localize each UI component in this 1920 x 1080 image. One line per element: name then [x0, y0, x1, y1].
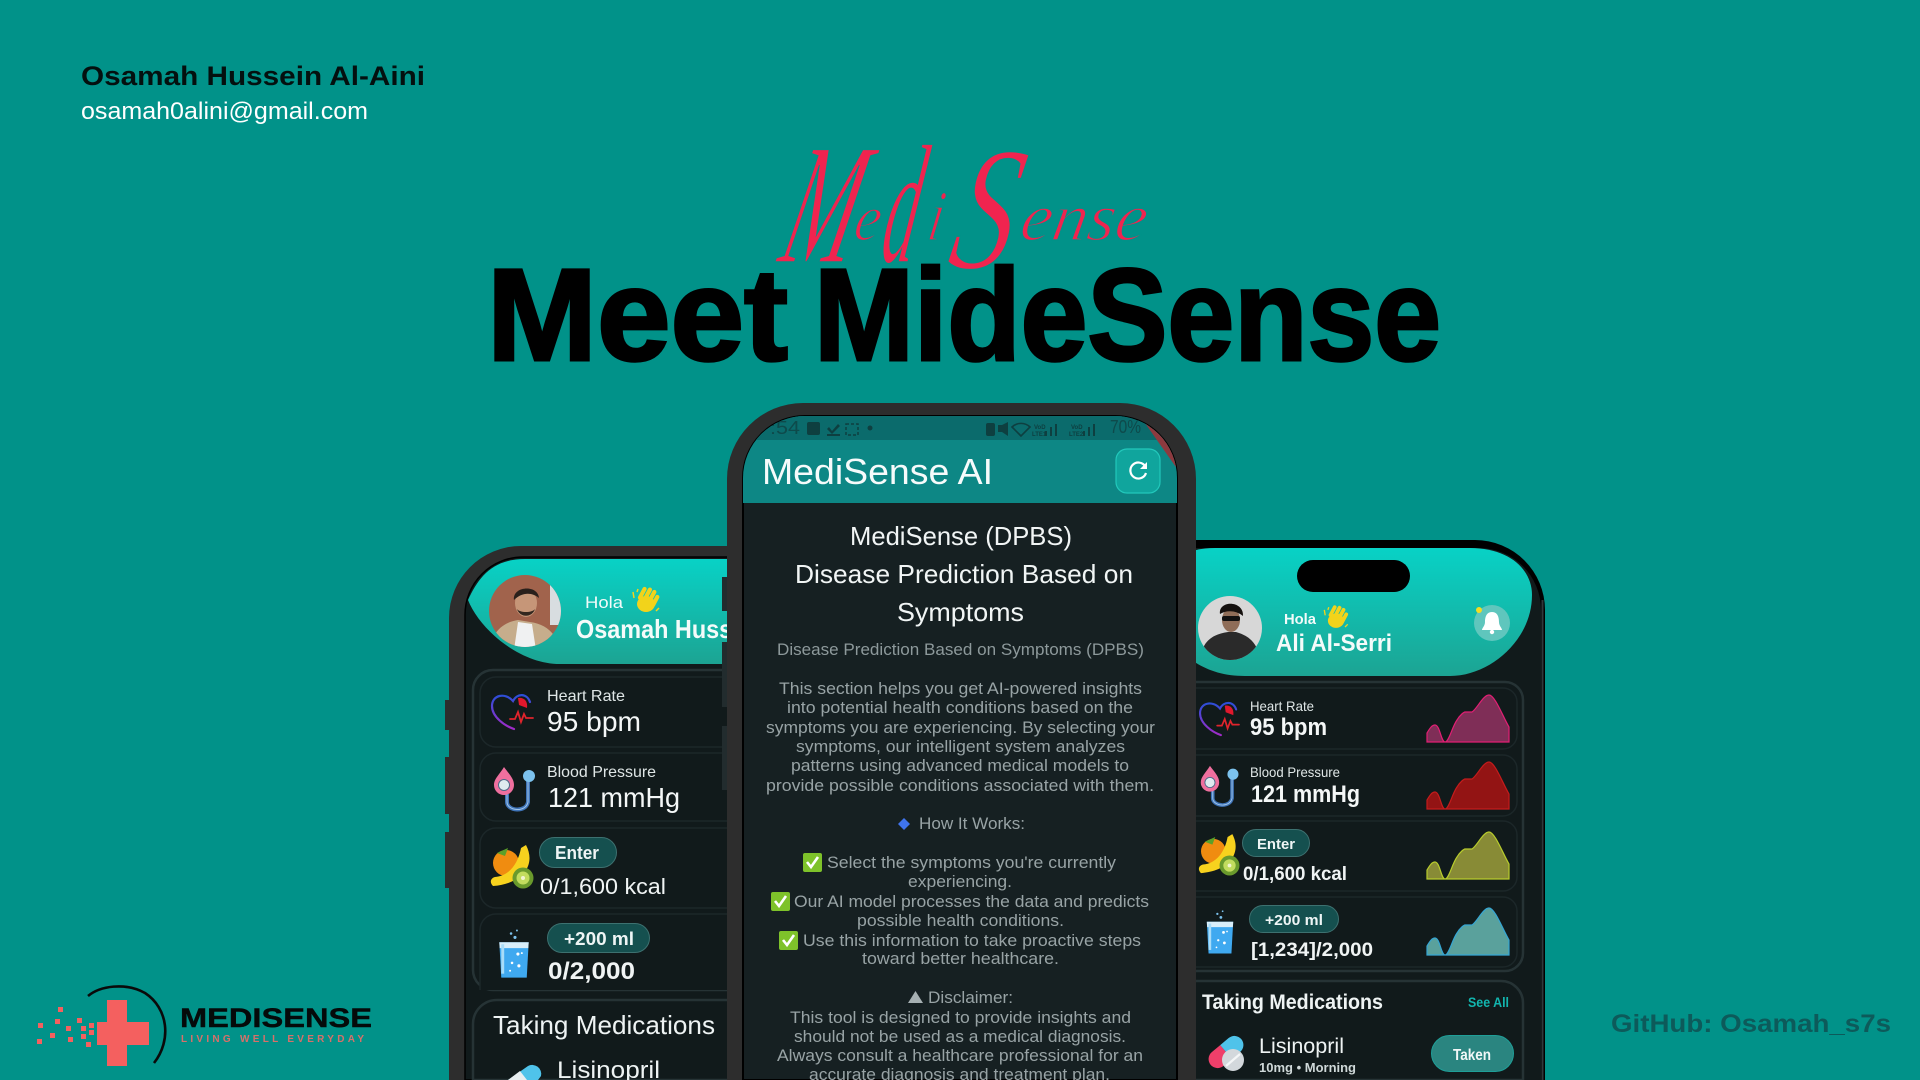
script wordmark: [765, 108, 1155, 307]
script wordmark: e: [849, 182, 888, 255]
left blood pressure: 121 mmHg: [548, 782, 680, 813]
left scroll indicators: [722, 577, 727, 790]
right water: [1207, 906, 1509, 961]
github label: GitHub: Osamah_s7s: [1611, 1010, 1891, 1038]
right medications panel: [1170, 981, 1523, 1080]
left pill icon: [508, 1065, 541, 1080]
disclaimer: Always consult a healthcare professional for an: [777, 1046, 1143, 1065]
right blood pressure: 121 mmHg: [1251, 781, 1360, 808]
left phone: [445, 546, 727, 1080]
how it works steps: experiencing.: [908, 872, 1012, 891]
how it works heading: How It Works:: [919, 814, 1025, 833]
description paragraph: This section helps you get AI-powered insights: [779, 679, 1142, 698]
description paragraph: symptoms, our intelligent system analyzes: [796, 737, 1125, 756]
chart: heart rate: [1427, 695, 1509, 742]
script wordmark: d: [871, 111, 939, 300]
right calories: Enter: [1257, 836, 1295, 853]
right medications panel: Lisinopril: [1259, 1035, 1344, 1058]
logo: [37, 986, 372, 1066]
how it works steps: possible health conditions.: [857, 911, 1064, 930]
main title: MideSense: [814, 241, 1441, 388]
screen heading: MediSense (DPBS): [850, 521, 1072, 551]
status bar: [743, 416, 1177, 440]
right heart rate: 95 bpm: [1250, 714, 1327, 741]
how it works steps: toward better healthcare.: [862, 949, 1059, 968]
right heart rate: Heart Rate: [1250, 698, 1314, 714]
app header: [743, 416, 1177, 503]
left heart rate: [492, 688, 641, 737]
center phone: [727, 403, 1196, 1080]
left vitals panel: [472, 668, 727, 992]
refresh button: [1116, 449, 1160, 493]
right blood pressure: Blood Pressure: [1250, 764, 1340, 780]
left avatar: [489, 575, 562, 650]
description paragraph: patterns using advanced medical models to: [791, 756, 1129, 775]
author name: Osamah Hussein Al-Aini: [81, 61, 425, 91]
taken button: Taken: [1453, 1047, 1491, 1064]
script wordmark: ense: [1015, 179, 1155, 255]
left calories: 0/1,600 kcal: [540, 874, 666, 899]
main title: [487, 241, 1441, 388]
how it works steps: Select the symptoms you're currently: [827, 853, 1117, 872]
right phone header: Hola: [1284, 611, 1317, 628]
notification bell: [1474, 605, 1510, 641]
left phone header: Hola: [585, 593, 624, 612]
right calories: [1199, 830, 1509, 885]
left medications panel: [472, 998, 727, 1080]
taken button: [1432, 1036, 1514, 1072]
right heart rate: [1200, 695, 1509, 742]
left phone header: [468, 559, 727, 664]
description paragraph: symptoms you are experiencing. By selecting your: [766, 718, 1155, 737]
disclaimer: This tool is designed to provide insights and: [790, 1008, 1131, 1027]
disclaimer: Disclaimer:: [928, 988, 1013, 1007]
left heart rate: Heart Rate: [547, 688, 625, 705]
disclaimer: [777, 988, 1143, 1080]
how it works heading: [898, 817, 1024, 830]
status bar: 70%: [1110, 417, 1141, 437]
description paragraph: [766, 679, 1155, 795]
how it works steps: Our AI model processes the data and predicts: [794, 892, 1149, 911]
left heart rate: 95 bpm: [547, 706, 641, 737]
left calories: Enter: [555, 843, 599, 863]
status bar: LTE2: [1069, 432, 1084, 438]
left blood pressure: [494, 764, 680, 813]
right phone: [1196, 540, 1545, 1080]
right water: +200 ml: [1265, 912, 1323, 929]
dynamic island: [1297, 560, 1410, 592]
status bar: LTE1: [1032, 432, 1047, 438]
right medications panel: 10mg • Morning: [1259, 1060, 1356, 1075]
left medications panel: Taking Medications: [493, 1010, 715, 1040]
right medications panel: Taking Medications: [1202, 991, 1383, 1014]
left blood pressure: Blood Pressure: [547, 764, 656, 781]
left calories: [491, 838, 666, 899]
chart: water: [1427, 908, 1509, 955]
status bar: :54: [770, 418, 800, 438]
main title: Meet: [487, 241, 788, 388]
status bar: VoD: [1071, 425, 1083, 431]
chart: blood pressure: [1427, 762, 1509, 809]
screen heading: Disease Prediction Based on: [795, 559, 1133, 589]
description paragraph: into potential health conditions based on the: [787, 698, 1133, 717]
how it works steps: [771, 853, 1149, 968]
screen subtitle: Disease Prediction Based on Symptoms (DPBS): [777, 640, 1144, 659]
right vitals panel: [1170, 682, 1523, 971]
logo: LIVING WELL EVERYDAY: [181, 1034, 364, 1045]
script wordmark: M: [765, 108, 891, 299]
right phone header: Ali Al-Serri: [1276, 630, 1392, 657]
left water: +200 ml: [564, 929, 634, 949]
author email: osamah0alini@gmail.com: [81, 98, 368, 125]
right blood pressure: [1201, 762, 1509, 809]
chart: calories: [1427, 832, 1509, 879]
left water: 0/2,000: [548, 958, 635, 985]
status bar: VoD: [1034, 425, 1046, 431]
right medications panel: See All: [1468, 994, 1509, 1010]
right calories: 0/1,600 kcal: [1243, 864, 1347, 885]
description paragraph: provide possible conditions associated with them.: [766, 776, 1154, 795]
script wordmark: S: [937, 112, 1040, 307]
right phone header: [1180, 548, 1532, 676]
app title: MediSense AI: [762, 451, 993, 492]
disclaimer: should not be used as a medical diagnosis.: [794, 1027, 1126, 1046]
how it works steps: Use this information to take proactive steps: [803, 931, 1141, 950]
right water: [1,234]/2,000: [1251, 940, 1373, 961]
screen heading: Symptoms: [897, 597, 1024, 627]
debug ribbon: [1146, 424, 1176, 467]
logo: MEDISENSE: [180, 1003, 372, 1033]
left phone header: Osamah Hussein: [576, 614, 766, 644]
left water: [499, 924, 650, 985]
screen heading: [795, 521, 1133, 627]
right avatar: [1198, 596, 1262, 660]
script wordmark: i: [923, 175, 951, 256]
